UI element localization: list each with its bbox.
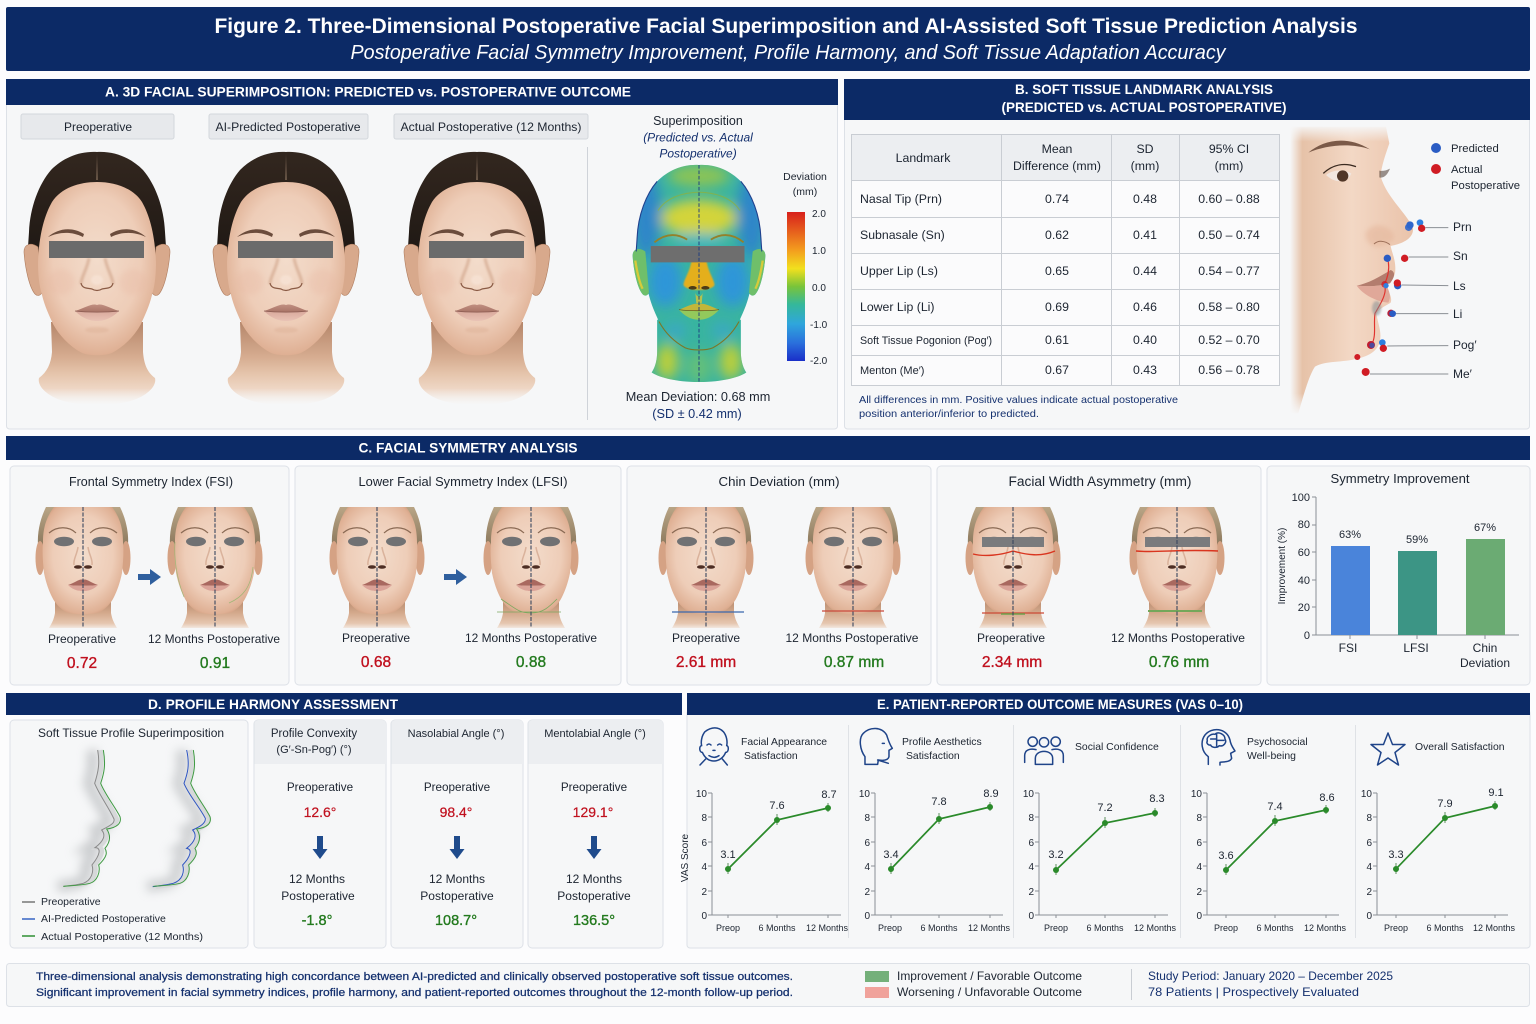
- line chart: 4: [701, 862, 707, 873]
- line chart: 10: [1023, 789, 1034, 800]
- landmark table: 0.67: [1045, 363, 1069, 377]
- bar chart: 0: [1304, 630, 1310, 642]
- face: AI-predicted: [213, 152, 359, 405]
- card: profile convexity: Postoperative: [281, 889, 355, 903]
- line chart: 4: [1028, 862, 1034, 873]
- line chart: 3.6: [1218, 850, 1234, 862]
- values: 0.88: [516, 654, 546, 671]
- section E panel: [680, 693, 1530, 948]
- values: [977, 631, 1245, 671]
- panel B: soft tissue landmark analysis: [844, 79, 1530, 429]
- values: 0.68: [361, 654, 391, 671]
- line chart: 6 Months: [1086, 923, 1124, 933]
- section D heading: [6, 693, 682, 715]
- mean deviation: (SD ± 0.42 mm): [652, 407, 742, 421]
- measure: social confidence: Social Confidence: [1075, 742, 1159, 753]
- legend: profile lines: AI-Predicted Postoperative: [41, 913, 166, 925]
- landmark table: Lower Lip (Li): [860, 300, 934, 314]
- values: [342, 631, 597, 671]
- line chart: 12 Months: [1304, 923, 1347, 933]
- bar chart: 63%: [1339, 529, 1361, 541]
- landmark table: (mm): [1215, 159, 1243, 173]
- line chart: 6: [1366, 838, 1372, 849]
- card: mentolabial angle: 12 Months: [566, 872, 622, 886]
- line chart: 9.1: [1488, 787, 1504, 799]
- card: mentolabial angle: [528, 720, 663, 948]
- line chart: 2: [1366, 887, 1372, 898]
- line chart: [1361, 787, 1516, 933]
- summary text: Significant improvement in facial symmetry indices, profile harmony, and patient-reported outcomes throughout the 12-month follow-up period.: [36, 987, 793, 999]
- values: Preoperative: [977, 631, 1045, 645]
- card: nasolabial angle: Postoperative: [420, 889, 494, 903]
- card: facial width asymmetry: [937, 466, 1261, 685]
- card: profile convexity: [254, 720, 386, 948]
- face: postoperative: [806, 507, 900, 628]
- mean deviation: Mean Deviation: 0.68 mm: [626, 390, 770, 404]
- face: preoperative: [966, 507, 1060, 628]
- line chart: [1191, 789, 1347, 933]
- bar chart: 100: [1292, 492, 1310, 504]
- line chart: 6: [864, 838, 870, 849]
- card: nasolabial angle: [391, 720, 523, 948]
- line chart: 12 Months: [806, 923, 849, 933]
- bar chart: 80: [1298, 519, 1310, 531]
- line chart: 10: [1191, 789, 1202, 800]
- superimposition heading: (Predicted vs. Actual: [643, 130, 753, 144]
- legend: landmarks: Actual: [1451, 164, 1482, 176]
- label: AI-predicted: [209, 114, 368, 139]
- table note: position anterior/inferior to predicted.: [859, 408, 1039, 420]
- heading A: A. 3D FACIAL SUPERIMPOSITION: PREDICTED vs. POSTOPERATIVE OUTCOME: [105, 84, 631, 100]
- landmark table: Nasal Tip (Prn): [860, 192, 942, 206]
- line chart: 3.1: [720, 849, 736, 861]
- legend: outcome: Worsening / Unfavorable Outcome: [897, 985, 1082, 999]
- line chart: 12 Months: [968, 923, 1011, 933]
- values: 0.76 mm: [1149, 654, 1209, 671]
- landmark table: 95% CI: [1209, 142, 1249, 156]
- title banner: [6, 7, 1530, 71]
- line chart: 2: [1028, 887, 1034, 898]
- line chart: 7.2: [1097, 802, 1113, 814]
- superimposition heading: Postoperative): [659, 146, 737, 160]
- bar chart: 67%: [1474, 522, 1496, 534]
- line chart: 4: [1366, 862, 1372, 873]
- measure: psychosocial well-being: Psychosocial: [1247, 737, 1308, 748]
- line chart: 2: [701, 887, 707, 898]
- mean deviation: [626, 390, 770, 421]
- superimposition heading: Superimposition: [653, 114, 743, 128]
- line chart: 4: [1196, 862, 1202, 873]
- landmark table: 0.60 – 0.88: [1198, 192, 1260, 206]
- card: mentolabial angle: 136.5°: [573, 913, 615, 929]
- card: mentolabial angle: 129.1°: [573, 804, 613, 820]
- landmark table: 0.65: [1045, 264, 1069, 278]
- landmark table: Mean: [1042, 142, 1073, 156]
- line chart: Preop: [716, 923, 740, 933]
- line chart: 8.6: [1319, 792, 1335, 804]
- card: profile convexity: 12 Months: [289, 872, 345, 886]
- landmark table: 0.58 – 0.80: [1198, 300, 1260, 314]
- landmark table: 0.43: [1133, 363, 1157, 377]
- line chart: Preop: [1044, 923, 1068, 933]
- summary text: Three-dimensional analysis demonstrating high concordance between AI-predicted and clinically observed postoperative soft tissue outcomes.: [36, 971, 793, 983]
- measure: profile aesthetics: [859, 729, 1011, 933]
- arrow: [586, 836, 602, 859]
- bar chart: 20: [1298, 602, 1310, 614]
- face: postoperative: [1130, 507, 1224, 628]
- subtitle: Postoperative Facial Symmetry Improvement, Profile Harmony, and Soft Tissue Adaptation Accuracy: [350, 42, 1226, 64]
- card: facial width asymmetry: Facial Width Asymmetry (mm): [1008, 474, 1192, 489]
- line chart: 7.9: [1437, 798, 1453, 810]
- values: Preoperative: [672, 631, 740, 645]
- line chart: 12 Months: [1473, 923, 1516, 933]
- measure: profile aesthetics: Profile Aesthetics: [902, 737, 982, 748]
- label: actual postoperative: Actual Postoperative (12 Months): [400, 120, 582, 134]
- icon: head profile: [860, 729, 892, 764]
- profile overlays: [57, 750, 210, 887]
- line chart: 6 Months: [758, 923, 796, 933]
- deviation colour scale: [783, 171, 828, 367]
- landmark table: (mm): [1131, 159, 1159, 173]
- landmark labels: Li: [1453, 307, 1462, 321]
- card: frontal symmetry index: Frontal Symmetry Index (FSI): [69, 475, 233, 489]
- legend: landmarks: Postoperative: [1451, 180, 1520, 192]
- card: nasolabial angle: 98.4°: [440, 804, 472, 820]
- arrow: [138, 569, 161, 585]
- line chart: 0: [1366, 911, 1372, 922]
- legend: landmarks: Predicted: [1451, 143, 1499, 155]
- line chart: 6 Months: [1426, 923, 1464, 933]
- heat-map face: [632, 164, 766, 382]
- card: profile convexity: -1.8°: [302, 913, 332, 929]
- line chart: 6 Months: [920, 923, 958, 933]
- line chart: 0: [1196, 911, 1202, 922]
- bar chart: 60: [1298, 547, 1310, 559]
- card: chin deviation: [627, 466, 931, 685]
- section D heading: D. PROFILE HARMONY ASSESSMENT: [148, 696, 398, 712]
- legend: profile lines: Actual Postoperative (12 Months): [41, 931, 203, 943]
- landmark labels: [1453, 220, 1477, 381]
- heading E: E. PATIENT-REPORTED OUTCOME MEASURES (VAS 0–10): [877, 696, 1243, 712]
- deviation colour scale: Deviation: [783, 171, 827, 183]
- legend: profile lines: [22, 896, 203, 943]
- card: lower facial symmetry index: Lower Facial Symmetry Index (LFSI): [358, 474, 568, 489]
- face: postoperative: [484, 507, 578, 628]
- line chart: 0: [1028, 911, 1034, 922]
- line chart: Preop: [878, 923, 902, 933]
- heading B: (PREDICTED vs. ACTUAL POSTOPERATIVE): [1002, 99, 1286, 115]
- profile face with landmarks: [1287, 125, 1448, 415]
- line chart: 6: [1196, 838, 1202, 849]
- panel A: 3D facial superimposition: [6, 79, 838, 429]
- footer: [6, 964, 1530, 1006]
- card: chin deviation: Chin Deviation (mm): [718, 474, 840, 489]
- values: 2.61 mm: [676, 654, 736, 671]
- landmark table: 0.74: [1045, 192, 1069, 206]
- line chart: 6 Months: [1256, 923, 1294, 933]
- landmark table: Difference (mm): [1013, 159, 1101, 173]
- measure: profile aesthetics: Satisfaction: [906, 751, 960, 762]
- bar chart: [1277, 492, 1519, 670]
- line chart: 10: [696, 789, 707, 800]
- card: profile convexity: Profile Convexity: [271, 728, 357, 740]
- card: nasolabial angle: 108.7°: [435, 913, 477, 929]
- landmark table: 0.52 – 0.70: [1198, 333, 1260, 347]
- card: nasolabial angle: Preoperative: [424, 781, 490, 794]
- card: frontal symmetry index: [10, 466, 289, 685]
- line chart: 3.2: [1048, 849, 1064, 861]
- icon: star: [1371, 733, 1405, 765]
- card: symmetry improvement bar chart: Symmetry Improvement: [1330, 471, 1470, 486]
- label: preoperative: [21, 114, 174, 139]
- card: nasolabial angle: 12 Months: [429, 872, 485, 886]
- section C heading: [6, 436, 1530, 460]
- superimposition heading: [643, 114, 753, 160]
- line chart: 0: [864, 911, 870, 922]
- landmark table: 0.48: [1133, 192, 1157, 206]
- measure: psychosocial well-being: Well-being: [1247, 751, 1296, 762]
- arrow: [450, 836, 464, 859]
- card: profile convexity: Preoperative: [287, 781, 353, 794]
- values: 0.91: [200, 655, 230, 672]
- bar chart: Deviation: [1460, 656, 1510, 670]
- bar chart: 59%: [1406, 534, 1428, 546]
- label: preoperative: Preoperative: [64, 120, 132, 134]
- measure: overall satisfaction: [1361, 733, 1516, 933]
- bar chart: 40: [1298, 575, 1310, 587]
- line chart: 2: [864, 887, 870, 898]
- face: postoperative: [168, 507, 262, 628]
- line chart: 8: [1366, 813, 1372, 824]
- values: 0.87 mm: [824, 654, 884, 671]
- values: 12 Months Postoperative: [786, 631, 919, 645]
- measure: psychosocial well-being: [1191, 730, 1347, 933]
- line chart: 7.4: [1267, 801, 1283, 813]
- measure: facial appearance: [696, 728, 849, 933]
- label: actual postoperative: [394, 114, 588, 139]
- summary text: [36, 971, 793, 999]
- line chart: 0: [701, 911, 707, 922]
- bar chart: Improvement (%): [1277, 528, 1288, 604]
- landmark table: 0.41: [1133, 228, 1157, 242]
- bar chart: LFSI: [1403, 641, 1429, 655]
- landmark table: SD: [1136, 142, 1154, 156]
- arrow: [312, 836, 328, 859]
- line chart: 3.3: [1388, 849, 1404, 861]
- landmark table: 0.61: [1045, 333, 1069, 347]
- line chart: [859, 788, 1011, 933]
- table note: All differences in mm. Positive values indicate actual postoperative: [859, 394, 1178, 406]
- card: mentolabial angle: Mentolabial Angle (°): [544, 728, 646, 740]
- line chart: 10: [859, 789, 870, 800]
- values: [672, 631, 919, 671]
- face: preoperative: [330, 507, 424, 628]
- table note: [859, 394, 1178, 420]
- line chart: Preop: [1214, 923, 1238, 933]
- deviation colour scale: 0.0: [812, 283, 826, 294]
- line chart: 7.8: [931, 796, 947, 808]
- card: profile convexity: (G′-Sn-Pog′) (°): [276, 744, 352, 756]
- heading B: [844, 79, 1530, 120]
- measure: facial appearance: Satisfaction: [744, 751, 798, 762]
- line chart: 7.6: [769, 800, 785, 812]
- values: Preoperative: [48, 632, 116, 646]
- line chart: 8.9: [983, 788, 999, 800]
- heading A: [6, 79, 838, 105]
- landmark table: Subnasale (Sn): [860, 228, 945, 242]
- measure: social confidence: [1023, 737, 1177, 933]
- bar chart: FSI: [1339, 641, 1357, 655]
- line chart: 3.4: [883, 849, 899, 861]
- legend: outcome: Improvement / Favorable Outcome: [897, 969, 1082, 983]
- card: soft tissue profile superimposition: Soft Tissue Profile Superimposition: [38, 726, 224, 740]
- landmark table: 0.46: [1133, 300, 1157, 314]
- measure: facial appearance: Facial Appearance: [741, 737, 827, 748]
- line chart: 8: [1028, 813, 1034, 824]
- deviation colour scale: 2.0: [812, 209, 826, 220]
- icon: face: [700, 728, 728, 765]
- heading B: B. SOFT TISSUE LANDMARK ANALYSIS: [1015, 81, 1273, 97]
- landmark table: Soft Tissue Pogonion (Pog′): [860, 335, 992, 347]
- card: profile convexity: 12.6°: [304, 804, 336, 820]
- line chart: 8.7: [821, 789, 837, 801]
- landmark table: 0.54 – 0.77: [1198, 264, 1260, 278]
- face: preoperative: [36, 507, 130, 628]
- card: nasolabial angle: Nasolabial Angle (°): [408, 728, 504, 740]
- card: mentolabial angle: Postoperative: [557, 889, 631, 903]
- heading E: [687, 693, 1530, 715]
- legend: profile lines: Preoperative: [41, 896, 101, 908]
- values: [48, 632, 280, 672]
- line chart: 8.3: [1149, 793, 1165, 805]
- landmark table: 0.40: [1133, 333, 1157, 347]
- face: preoperative: [24, 152, 170, 405]
- line chart: [696, 789, 849, 933]
- line chart: 8: [701, 813, 707, 824]
- landmark table: 0.69: [1045, 300, 1069, 314]
- landmark table: Upper Lip (Ls): [860, 264, 938, 278]
- card: lower facial symmetry index: [295, 466, 621, 685]
- values: 12 Months Postoperative: [148, 632, 280, 646]
- study period: 78 Patients | Prospectively Evaluated: [1148, 985, 1359, 999]
- values: Preoperative: [342, 631, 410, 645]
- measure: overall satisfaction: Overall Satisfaction: [1415, 742, 1505, 753]
- values: 0.72: [67, 655, 97, 672]
- deviation colour scale: -2.0: [810, 356, 828, 367]
- landmark table: 0.62: [1045, 228, 1069, 242]
- line chart: 12 Months: [1134, 923, 1177, 933]
- landmark table: 0.50 – 0.74: [1198, 228, 1260, 242]
- landmark labels: Sn: [1453, 249, 1468, 263]
- face: preoperative: [658, 507, 754, 628]
- deviation colour scale: 1.0: [812, 246, 826, 257]
- landmark table: Landmark: [896, 151, 951, 165]
- card: soft tissue profile superimposition: [10, 720, 248, 948]
- section C heading: C. FACIAL SYMMETRY ANALYSIS: [358, 440, 578, 456]
- icon: head with brain: [1202, 730, 1235, 765]
- landmark labels: Prn: [1453, 220, 1472, 234]
- line chart: 8: [1196, 813, 1202, 824]
- landmark table: [851, 134, 1280, 386]
- study period: Study Period: January 2020 – December 2025: [1148, 969, 1393, 983]
- line chart: Preop: [1384, 923, 1408, 933]
- line chart: 6: [701, 838, 707, 849]
- section E panel: VAS Score: [680, 833, 691, 882]
- line chart: 8: [864, 813, 870, 824]
- values: 12 Months Postoperative: [1111, 631, 1245, 645]
- line chart: 2: [1196, 887, 1202, 898]
- landmark table: 0.44: [1133, 264, 1157, 278]
- legend: landmarks: [1431, 143, 1520, 192]
- title: Figure 2. Three-Dimensional Postoperative Facial Superimposition and AI-Assisted Soft Tissue Prediction Analysis: [214, 14, 1358, 38]
- label: AI-predicted: AI-Predicted Postoperative: [216, 120, 361, 134]
- landmark labels: Me′: [1453, 367, 1473, 381]
- line chart: [1023, 789, 1177, 933]
- deviation colour scale: (mm): [793, 186, 817, 198]
- landmark table: 0.56 – 0.78: [1198, 363, 1260, 377]
- icon: people: [1025, 737, 1063, 764]
- line chart: 6: [1028, 838, 1034, 849]
- card: mentolabial angle: Preoperative: [561, 781, 627, 794]
- line chart: 10: [1361, 789, 1372, 800]
- values: 2.34 mm: [982, 654, 1042, 671]
- study period: [1148, 969, 1393, 999]
- card: symmetry improvement bar chart: [1267, 466, 1530, 685]
- legend: outcome: [865, 969, 1082, 999]
- bar chart: Chin: [1473, 641, 1497, 655]
- landmark labels: Ls: [1453, 279, 1466, 293]
- landmark table: Menton (Me′): [860, 365, 924, 377]
- arrow: [444, 569, 467, 585]
- landmark labels: Pog′: [1453, 338, 1477, 352]
- line chart: 4: [864, 862, 870, 873]
- deviation colour scale: -1.0: [810, 320, 828, 331]
- face: actual postoperative: [404, 152, 550, 405]
- values: 12 Months Postoperative: [465, 631, 597, 645]
